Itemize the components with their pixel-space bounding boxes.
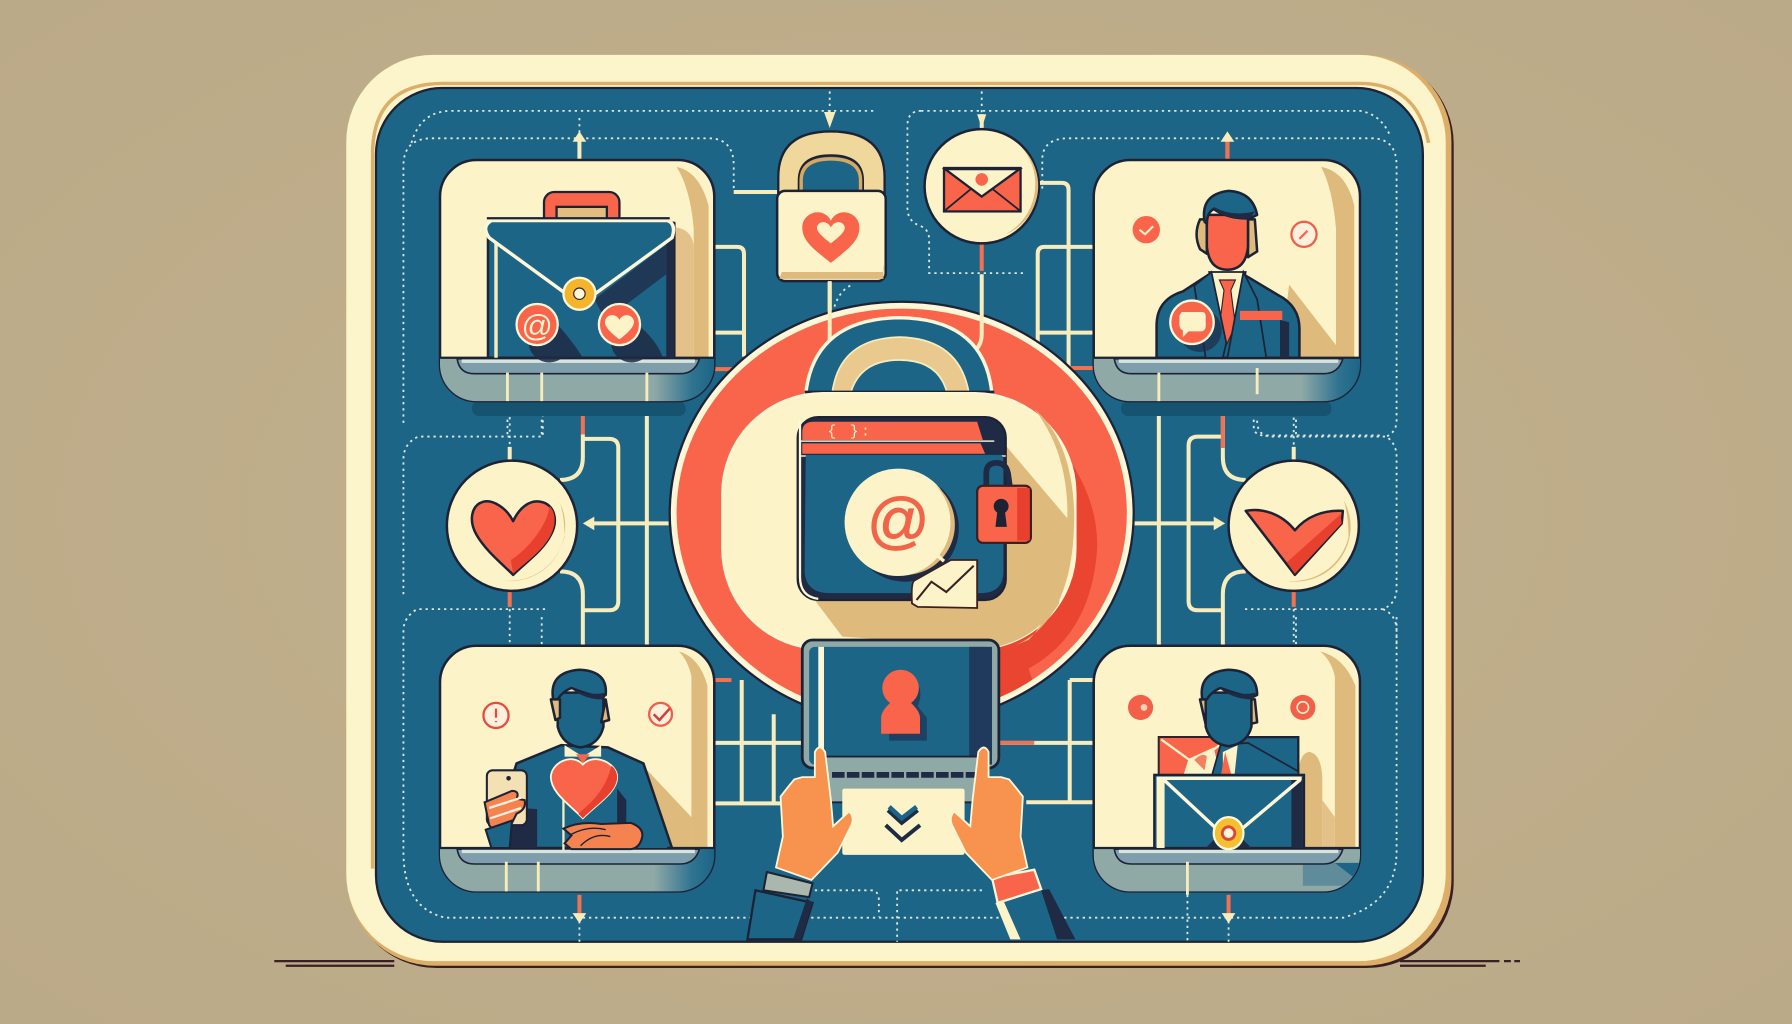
icon: alert badge (483, 703, 509, 728)
window code marks: { }: (827, 424, 872, 440)
central lock emblem (670, 274, 1134, 725)
hand on desk (563, 823, 667, 849)
hand: left (747, 747, 853, 939)
icon: chat badge (1170, 301, 1222, 352)
panel: bottom-left person (440, 646, 714, 894)
icon: left heart circle (447, 461, 577, 591)
shackle (805, 318, 994, 394)
icon: keyhole figure (881, 670, 927, 741)
person: figure with heart and phone (485, 670, 672, 850)
laptop (802, 640, 999, 855)
icon: briefcase envelope (486, 192, 674, 362)
keyboard (818, 757, 985, 802)
icon: padlock with heart (777, 131, 886, 281)
icon: heart badge (599, 304, 640, 345)
icon: refresh badge (1291, 222, 1317, 247)
outer frame (346, 55, 1454, 968)
person: figure behind envelope (1159, 670, 1298, 777)
icon: right heart circle (1229, 461, 1359, 591)
icon: phone (485, 770, 527, 848)
ground lines (274, 961, 1520, 966)
icon: red badge (1128, 695, 1153, 720)
at-sign badge (845, 469, 959, 582)
lock body (722, 393, 1075, 649)
icon: seal (563, 278, 595, 310)
person: suit figure (1157, 191, 1299, 358)
panel: top-left envelope (440, 160, 714, 416)
icon: at badge (517, 304, 558, 345)
icon: sealed envelope (1154, 775, 1304, 849)
icon: at badge: @ (521, 308, 553, 343)
icon: heart (551, 759, 617, 818)
arrowheads (573, 112, 1235, 923)
connector lines (510, 114, 1294, 803)
small envelope (912, 547, 977, 608)
small padlock (977, 463, 1031, 543)
panel: top-right person (1094, 160, 1360, 416)
illustration: secure email network (274, 54, 1520, 968)
dotted circuit paths (403, 91, 1397, 942)
at-sign badge: @ (867, 487, 930, 556)
coloured connector segments (510, 139, 1294, 914)
icon: envelope circle (925, 129, 1039, 243)
icon: spiral badge (1290, 695, 1315, 720)
icon: check badge (649, 703, 672, 726)
browser window (798, 417, 1006, 600)
hand: right (951, 747, 1075, 939)
card with chevrons (842, 789, 965, 855)
panel: bottom-right person with envelope (1094, 646, 1360, 895)
icon: check badge (1133, 216, 1160, 243)
